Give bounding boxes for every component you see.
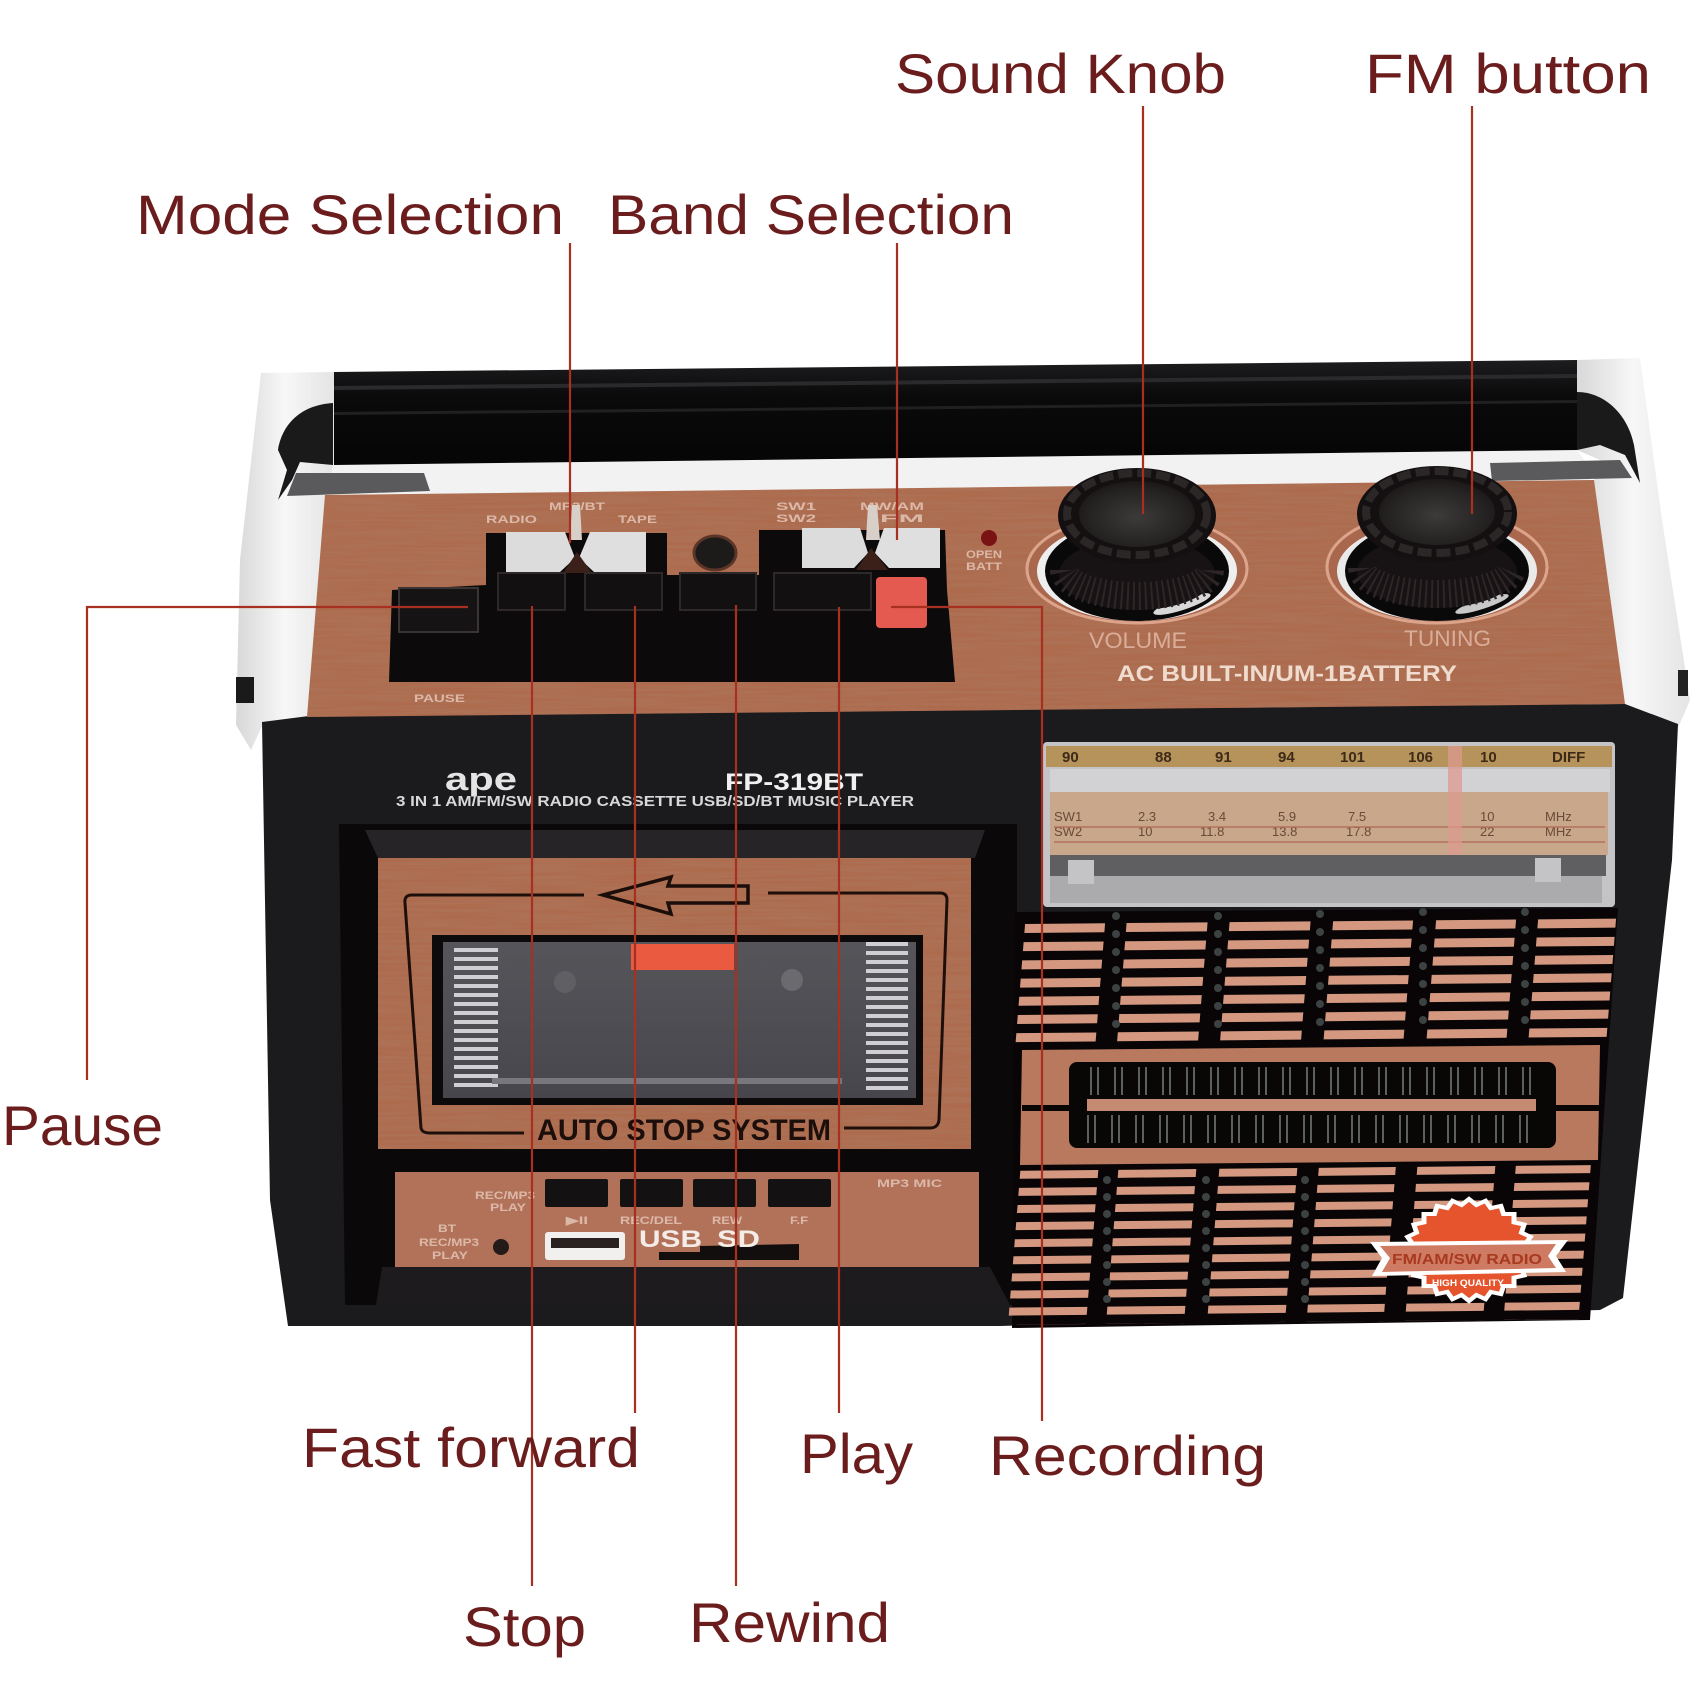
strip labels <box>419 1178 942 1262</box>
mode switch <box>506 505 646 573</box>
tuner dial <box>1043 742 1615 907</box>
frequency numbers: 106 <box>1408 749 1433 766</box>
grille backing <box>1012 908 1618 1328</box>
callout: fast forward: Fast forward <box>302 1416 640 1479</box>
switch labels: TAPE <box>618 514 657 526</box>
pause text: PAUSE <box>414 693 465 705</box>
scale labels: 13.8 <box>1272 824 1297 839</box>
frequency numbers: 91 <box>1215 749 1232 766</box>
chrome strip under handle <box>325 450 1590 497</box>
brand and model text: 3 IN 1 AM/FM/SW RADIO CASSETTE USB/SD/BT MUSIC PLAYER <box>396 793 914 810</box>
scale labels: 11.8 <box>1200 824 1224 839</box>
callout: recording: Recording <box>989 1424 1266 1487</box>
knob captions: VOLUME <box>1089 628 1187 653</box>
callout: sound knob: Sound Knob <box>895 42 1226 105</box>
sd slot <box>659 1244 799 1260</box>
brand and model text: ape <box>445 761 517 797</box>
frequency strip <box>1046 746 1612 767</box>
auto stop text: AUTO STOP SYSTEM <box>537 1114 831 1147</box>
knob captions: AC BUILT-IN/UM-1BATTERY <box>1117 661 1457 686</box>
scale area <box>1050 792 1608 855</box>
upper dots <box>1116 912 1525 1030</box>
right handle clip <box>1577 392 1640 483</box>
switch labels: RADIO <box>486 514 538 526</box>
frequency numbers <box>1062 749 1585 766</box>
gray tab left <box>287 473 430 496</box>
spool left <box>554 971 576 993</box>
frequency numbers: 88 <box>1155 749 1172 766</box>
fast forward key <box>585 573 662 610</box>
brand and model text <box>396 761 914 810</box>
left handle clip <box>278 403 333 500</box>
callout: play: Play <box>800 1422 913 1485</box>
slot ticks bottom <box>1087 1115 1530 1143</box>
right window stripes <box>866 942 908 1092</box>
lower well lip <box>376 1267 1010 1305</box>
tape label <box>631 944 734 970</box>
scale labels: SW1 <box>1054 809 1082 824</box>
scale labels: 17.8 <box>1346 824 1371 839</box>
right chrome side <box>1577 358 1690 728</box>
strip labels: BT <box>438 1223 456 1235</box>
switch labels: SW2 <box>776 513 816 525</box>
cover clips <box>1068 858 1561 884</box>
frequency numbers: 94 <box>1278 749 1295 766</box>
frequency numbers: 10 <box>1480 749 1497 766</box>
frequency numbers: 101 <box>1340 749 1365 766</box>
usb text: USB <box>639 1226 702 1253</box>
dark band <box>1050 855 1606 876</box>
microphone <box>694 536 736 570</box>
wood door <box>378 858 971 1149</box>
scale labels: 10 <box>1480 809 1494 824</box>
callout: FM button: FM button <box>1365 42 1651 105</box>
strip labels: ▶II <box>564 1215 588 1227</box>
key well <box>389 530 955 682</box>
gray tab right <box>1490 460 1632 481</box>
strip labels: MP3 MIC <box>877 1178 942 1190</box>
direction arrow <box>603 877 748 914</box>
chrome reflection <box>1050 769 1610 792</box>
switch labels <box>486 501 924 526</box>
radio device <box>236 358 1690 1328</box>
callout: band selection: Band Selection <box>608 183 1014 246</box>
volume knob <box>1027 468 1247 623</box>
rewind key <box>680 573 756 610</box>
strip labels: REC/MP3 <box>419 1237 479 1249</box>
stop key <box>498 573 565 610</box>
scale labels: 5.9 <box>1278 809 1296 824</box>
top wood panel <box>307 480 1625 717</box>
left side latch <box>236 677 254 703</box>
callout: pause <box>2 607 468 1157</box>
tuning knob <box>1327 466 1547 623</box>
band switch <box>802 505 940 570</box>
strip labels: REW <box>712 1215 743 1227</box>
tuning needle <box>1448 746 1462 856</box>
callout: recording <box>891 607 1266 1487</box>
lower dots <box>1107 1180 1305 1310</box>
indicator LED <box>966 530 1002 573</box>
play key <box>774 573 871 610</box>
upper bars <box>1055 919 1577 1050</box>
strip labels: F.F <box>790 1215 808 1227</box>
scale labels: 2.3 <box>1138 809 1156 824</box>
scale labels <box>1054 809 1572 839</box>
scale labels: SW2 <box>1054 824 1082 839</box>
switch labels: MW/AM <box>860 501 924 513</box>
strip labels: REC/DEL <box>620 1215 682 1227</box>
scale labels: 7.5 <box>1348 809 1366 824</box>
lower bars <box>1047 1165 1553 1324</box>
spool right <box>781 969 803 991</box>
badge: HIGH QUALITY <box>1432 1278 1504 1288</box>
callout: mode selection: Mode Selection <box>136 183 564 246</box>
door outline <box>405 893 947 1133</box>
left chrome side <box>236 372 334 750</box>
scale labels: 10 <box>1138 824 1152 839</box>
scale line <box>1054 827 1605 842</box>
indicator LED: BATT <box>966 561 1002 573</box>
switch labels: FM <box>880 513 924 525</box>
record key <box>876 577 927 628</box>
switch labels: SW1 <box>776 501 816 513</box>
right side latch <box>1678 670 1688 696</box>
strip labels: REC/MP3 <box>475 1190 535 1202</box>
front body <box>262 704 1678 1326</box>
strip labels: PLAY <box>432 1250 469 1262</box>
centre slot <box>1069 1062 1556 1148</box>
cassette window <box>432 935 923 1105</box>
callout: stop: Stop <box>463 1595 586 1658</box>
panel: cassette door <box>339 824 1017 1305</box>
centre wood band <box>1020 1045 1600 1165</box>
switch labels: MP3/BT <box>549 501 605 513</box>
pause key <box>399 588 478 632</box>
lower cover <box>1050 876 1602 903</box>
sd text: SD <box>717 1226 760 1253</box>
panel: speaker grille <box>1012 908 1618 1328</box>
frequency numbers: DIFF <box>1552 749 1585 766</box>
frequency numbers: 90 <box>1062 749 1079 766</box>
left window stripes <box>454 948 498 1092</box>
carry handle <box>334 360 1577 465</box>
knob captions: TUNING <box>1404 626 1491 651</box>
scale labels: 22 <box>1480 824 1494 839</box>
scale labels: MHz <box>1545 809 1572 824</box>
knob captions <box>1089 626 1491 686</box>
lower control strip <box>395 1172 979 1267</box>
cassette well <box>339 824 1017 1305</box>
strip labels: PLAY <box>490 1202 527 1214</box>
slot ticks top <box>1090 1067 1535 1095</box>
usb port <box>545 1232 625 1260</box>
badge: FM/AM/SW RADIO <box>1392 1251 1542 1268</box>
scale labels: 3.4 <box>1208 809 1226 824</box>
panel: piano key controls <box>389 501 955 705</box>
line-in jack <box>493 1239 509 1255</box>
scale labels: MHz <box>1545 824 1572 839</box>
slot strip <box>1087 1099 1536 1111</box>
callout: pause: Pause <box>2 1094 163 1157</box>
indicator LED: OPEN <box>966 549 1002 561</box>
badge <box>1370 1196 1568 1304</box>
small keys <box>545 1179 831 1207</box>
brand and model text: FP-319BT <box>725 769 863 796</box>
callout: rewind: Rewind <box>689 1591 890 1654</box>
